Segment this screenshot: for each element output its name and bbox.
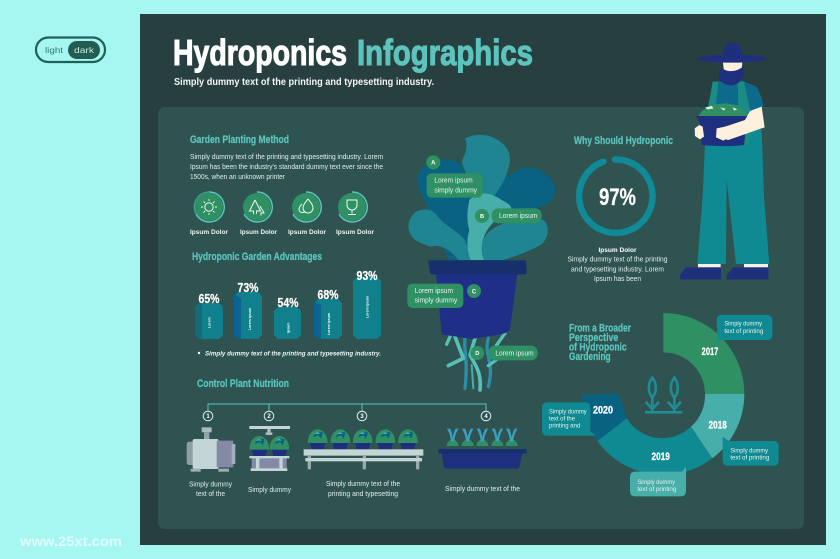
- pot rim: [428, 260, 527, 274]
- section: garden advantages: [192, 251, 381, 358]
- callout B: [492, 208, 542, 223]
- captions: [189, 481, 520, 498]
- theme toggle: light: [45, 45, 64, 55]
- bullet note: Simply dummy text of the printing and typesetting industry.: [205, 350, 381, 358]
- title: Hydroponics: [173, 32, 347, 73]
- hand left: [695, 125, 704, 139]
- heading: control plant nutrition: Control Plant Nutrition: [197, 378, 289, 390]
- donut gauge 97%: [579, 159, 653, 233]
- gauge description: Ipsum has been: [594, 276, 641, 283]
- body text: Ipsum has been the industry's standard dummy text ever since the: [190, 164, 383, 171]
- segment 2020: [582, 393, 627, 441]
- callout 2017: Simply dummy: [724, 322, 762, 328]
- callout A: Lorem ipsum: [434, 178, 473, 185]
- bar 54%: [274, 295, 301, 339]
- captions: Simply dummy: [248, 487, 291, 494]
- shirt: [707, 81, 763, 145]
- marker A: [426, 155, 440, 169]
- inner content panel: [158, 107, 804, 529]
- callout 2019: text of printing: [637, 487, 676, 493]
- connector tree with numbered nodes: 3: [360, 414, 364, 420]
- callout 2020: printing and: [549, 423, 580, 429]
- bar 73%: [234, 280, 262, 339]
- leaf right: [480, 219, 548, 260]
- gauge description: Ipsum Dolor: [598, 247, 637, 254]
- marker A: A: [431, 161, 436, 167]
- gauge description: and typesetting industry. Lorem: [571, 266, 664, 274]
- callout 2020: Simply dummy: [549, 410, 587, 416]
- icon labels: Ipsum Dolor: [240, 229, 277, 236]
- beard: [719, 66, 744, 85]
- connector tree with numbered nodes: 2: [267, 414, 271, 420]
- bar 68%: 68%: [318, 287, 339, 302]
- trousers: [697, 127, 769, 264]
- leaf left: [408, 209, 472, 260]
- crate produce: [698, 103, 747, 116]
- callout 2017: [717, 315, 772, 343]
- callout 2017: text of printing: [724, 329, 763, 335]
- year labels: 2018: [708, 420, 727, 432]
- heading: from a broader perspective: of Hydroponic: [569, 342, 627, 354]
- callout 2019: [630, 467, 686, 496]
- callout 2018: text of printing: [730, 455, 769, 461]
- theme toggle: [36, 38, 105, 62]
- heading: why should hydroponic: Why Should Hydroponic: [574, 135, 673, 147]
- donut gauge 97%: 97%: [599, 184, 636, 211]
- bar 93%: [353, 268, 381, 339]
- captions: printing and typesetting: [328, 491, 398, 498]
- plant illustration: [407, 135, 555, 390]
- bar 93%: Lorem Ipsum: [366, 296, 370, 318]
- bar 73%: Lorem Ipsum: [248, 308, 252, 330]
- bar 93%: 93%: [356, 268, 378, 283]
- icon: trees: [243, 192, 272, 222]
- heading: hydroponic garden advantages: Hydroponic Garden Advantages: [192, 251, 322, 263]
- section: garden planting method: [190, 134, 383, 236]
- theme toggle: dark: [74, 45, 95, 55]
- callout 2020: [542, 402, 596, 436]
- heading: garden planting method: Garden Planting Method: [190, 134, 289, 146]
- captions: Simply dummy text of the: [326, 481, 400, 488]
- gauge description: Simply dummy text of the printing: [568, 256, 668, 264]
- connector tree with numbered nodes: 4: [484, 414, 488, 420]
- bar 54%: 54%: [278, 295, 299, 310]
- marker C: C: [472, 289, 477, 295]
- callout D: Lorem ipsum: [495, 350, 534, 357]
- bar 68%: Lorem Ipsum: [327, 313, 331, 335]
- year labels: [593, 346, 727, 463]
- callout C: simply dummy: [415, 298, 458, 305]
- segment 2018: [691, 394, 744, 458]
- watermark: www.25xt.com: [19, 533, 122, 549]
- neck and face: [723, 61, 742, 78]
- overall bib and straps: [705, 82, 750, 145]
- connector tree with numbered nodes: [203, 404, 491, 421]
- callout C: Lorem ipsum: [415, 288, 453, 295]
- marker C: [467, 284, 481, 298]
- hand right: [716, 126, 732, 141]
- bar 65%: [195, 291, 223, 339]
- segment 2019: [597, 418, 712, 475]
- illustration: pot table: [304, 429, 423, 469]
- captions: text of the: [196, 491, 225, 498]
- callout C: [407, 284, 463, 308]
- heading: from a broader perspective: Gardening: [569, 351, 611, 363]
- year labels: 2019: [651, 451, 670, 463]
- callout 2018: [723, 437, 779, 466]
- captions: Simply dummy: [189, 482, 232, 488]
- farmer illustration: [680, 43, 769, 279]
- captions: Simply dummy text of the: [445, 486, 520, 493]
- dark main panel: [140, 14, 826, 545]
- bar 65%: Lorem: [208, 317, 212, 328]
- pot body: [436, 273, 517, 339]
- callout A: [427, 173, 483, 198]
- body text: 1500s, when an unknown printer: [190, 174, 286, 181]
- icon labels: Ipsum Dolor: [190, 229, 228, 236]
- hat: [697, 43, 767, 63]
- icon labels: Ipsum Dolor: [288, 229, 326, 236]
- bar 65%: 65%: [198, 291, 220, 306]
- title accent: Infographics: [357, 32, 533, 73]
- heading: from a broader perspective: Perspective: [569, 332, 618, 344]
- connector tree with numbered nodes: 1: [206, 414, 210, 420]
- segment 2017: [663, 313, 744, 394]
- heading: from a broader perspective: [569, 322, 632, 363]
- socks: [698, 264, 768, 267]
- leaf dark right: [490, 167, 555, 210]
- illustration: pump: [187, 427, 235, 472]
- marker D: [470, 346, 484, 360]
- callout 2019: Simply dummy: [637, 480, 675, 486]
- arm: [717, 107, 765, 140]
- callout A: simply dummy: [434, 187, 477, 194]
- year labels: 2017: [702, 346, 718, 358]
- icon labels: Ipsum Dolor: [336, 229, 374, 236]
- section: control plant nutrition: [187, 378, 527, 498]
- marker D: D: [475, 351, 479, 357]
- heading: from a broader perspective: From a Broader: [569, 322, 632, 334]
- body text: [190, 154, 383, 181]
- icon: sun: [194, 192, 224, 222]
- illustration: sprout tray: [438, 429, 527, 469]
- year labels: 2020: [593, 405, 613, 417]
- callout 2020: text of the: [549, 416, 576, 422]
- marker B: [475, 209, 489, 223]
- callout D: [488, 346, 538, 360]
- bar 68%: [314, 287, 342, 339]
- icon labels: [190, 229, 374, 236]
- roots: [447, 333, 505, 390]
- body text: Simply dummy text of the printing and typesetting industry. Lorem: [190, 154, 383, 161]
- leaf top: [462, 135, 510, 197]
- subtitle: Simply dummy text of the printing and typesetting industry.: [174, 76, 434, 88]
- callout 2018: Simply dummy: [730, 448, 768, 454]
- marker B: B: [480, 214, 484, 220]
- icon: plants: [645, 378, 682, 412]
- leaf center: [467, 193, 511, 260]
- leaf dark left: [418, 159, 472, 260]
- section: why should hydroponic: [568, 135, 673, 283]
- bar 73%: 73%: [238, 280, 259, 295]
- icon: water drops: [292, 192, 321, 222]
- gauge description: [568, 247, 668, 283]
- section: timeline donut: [542, 313, 779, 496]
- icon: glass: [338, 192, 367, 222]
- illustration: hydroponic stand: [249, 426, 290, 471]
- callout B: Lorem ipsum: [499, 213, 537, 220]
- bar 54%: Ipsum: [286, 323, 290, 333]
- shoes: [680, 267, 768, 279]
- crate: [696, 116, 747, 146]
